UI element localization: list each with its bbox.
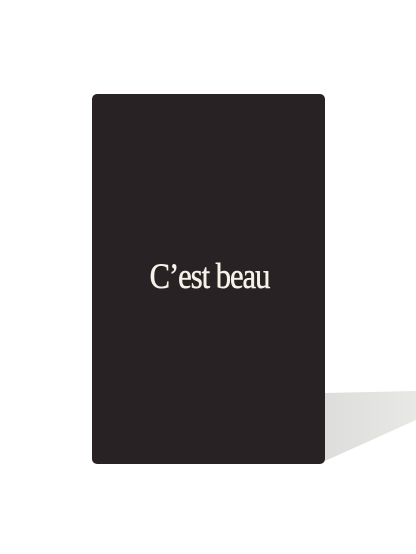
title: C'est beau: C’est beau — [149, 256, 269, 296]
panel: dark card — [92, 94, 325, 464]
